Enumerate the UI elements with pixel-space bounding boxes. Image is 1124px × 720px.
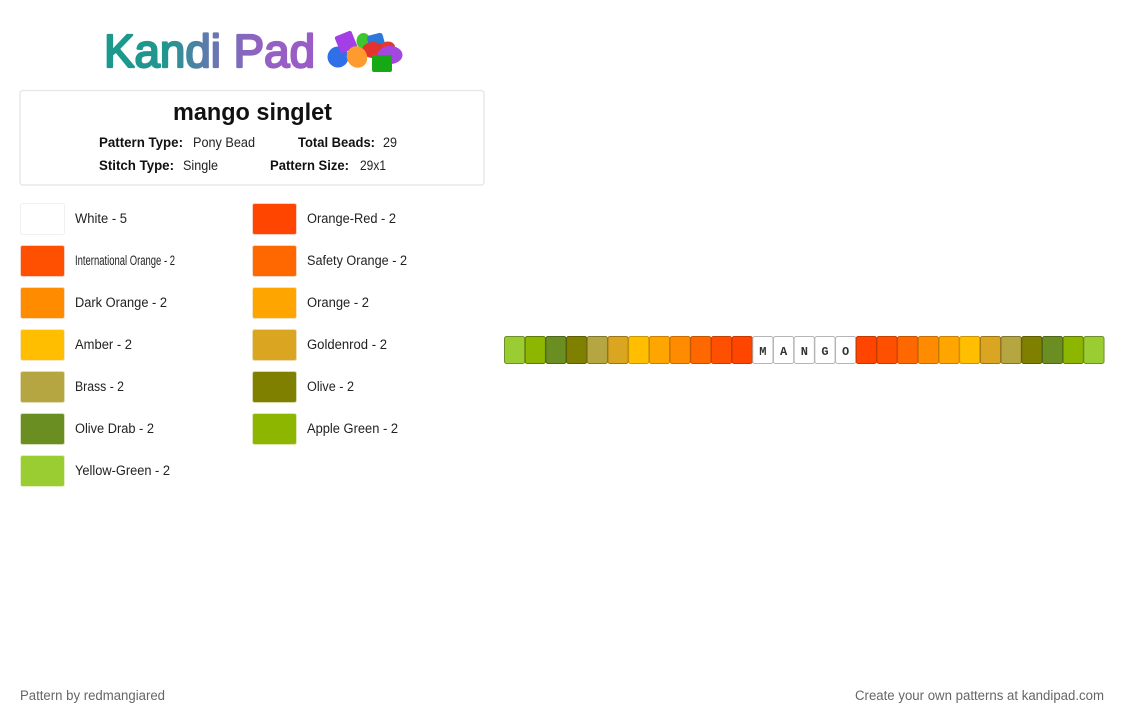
letter beads: MANGO: G: [821, 345, 829, 359]
total beads: Total Beads:: [298, 135, 375, 150]
legend: Olive: Olive - 2: [307, 379, 354, 394]
legend: Dark Orange: Dark Orange - 2: [75, 295, 167, 310]
legend: Orange-Red: Orange-Red - 2: [307, 211, 396, 226]
legend: Orange: Orange - 2: [307, 295, 369, 310]
legend: Brass: Brass - 2: [75, 379, 124, 394]
title: mango singlet: [173, 99, 332, 126]
footer: pattern credit: Pattern by redmangiared: [20, 688, 165, 703]
stitch type: Stitch Type:: [99, 158, 174, 173]
legend: Safety Orange: [252, 246, 407, 276]
stitch type: Single: [183, 158, 218, 173]
legend: Yellow-Green: [20, 456, 170, 486]
legend: Olive: [252, 372, 354, 402]
legend: Goldenrod: Goldenrod - 2: [307, 337, 387, 352]
stitch type: [99, 158, 218, 173]
pattern type: Pattern Type:: [99, 135, 183, 150]
legend: White: [20, 204, 127, 234]
pattern size: Pattern Size:: [270, 158, 349, 173]
legend: Brass: [20, 372, 124, 402]
legend: International Orange: [20, 246, 175, 276]
legend: Orange-Red: [252, 204, 396, 234]
legend: Apple Green: [252, 414, 398, 444]
colour legend: [20, 204, 407, 486]
legend: White: White - 5: [75, 211, 127, 226]
letter beads: MANGO: O: [842, 345, 849, 359]
legend: Apple Green: Apple Green - 2: [307, 421, 398, 436]
legend: Yellow-Green: Yellow-Green - 2: [75, 463, 170, 478]
legend: Amber: [20, 330, 132, 360]
icon: bead pile: [328, 30, 402, 72]
legend: Amber: Amber - 2: [75, 337, 132, 352]
letter beads: MANGO: N: [801, 345, 808, 359]
legend: Orange: [252, 288, 369, 318]
panel: pattern info: [20, 90, 484, 185]
legend: Goldenrod: [252, 330, 387, 360]
pattern size: 29x1: [360, 158, 386, 173]
legend: International Orange: International Orange - 2: [75, 253, 175, 268]
footer: site credit: Create your own patterns at kandipad.com: [855, 688, 1104, 703]
letter beads: MANGO: A: [780, 345, 788, 359]
legend: Safety Orange: Safety Orange - 2: [307, 253, 407, 268]
logo wordmark: Kandi Pad: [104, 25, 315, 77]
bead pattern strip: [504, 336, 1104, 364]
pattern type: Pony Bead: [193, 135, 255, 150]
logo: [104, 25, 402, 77]
legend: Olive Drab: Olive Drab - 2: [75, 421, 154, 436]
letter beads: MANGO: M: [759, 345, 767, 359]
legend: Olive Drab: [20, 414, 154, 444]
pattern type: [99, 135, 255, 150]
legend: Dark Orange: [20, 288, 167, 318]
total beads: 29: [383, 135, 397, 150]
letter beads: MANGO: [753, 336, 856, 364]
